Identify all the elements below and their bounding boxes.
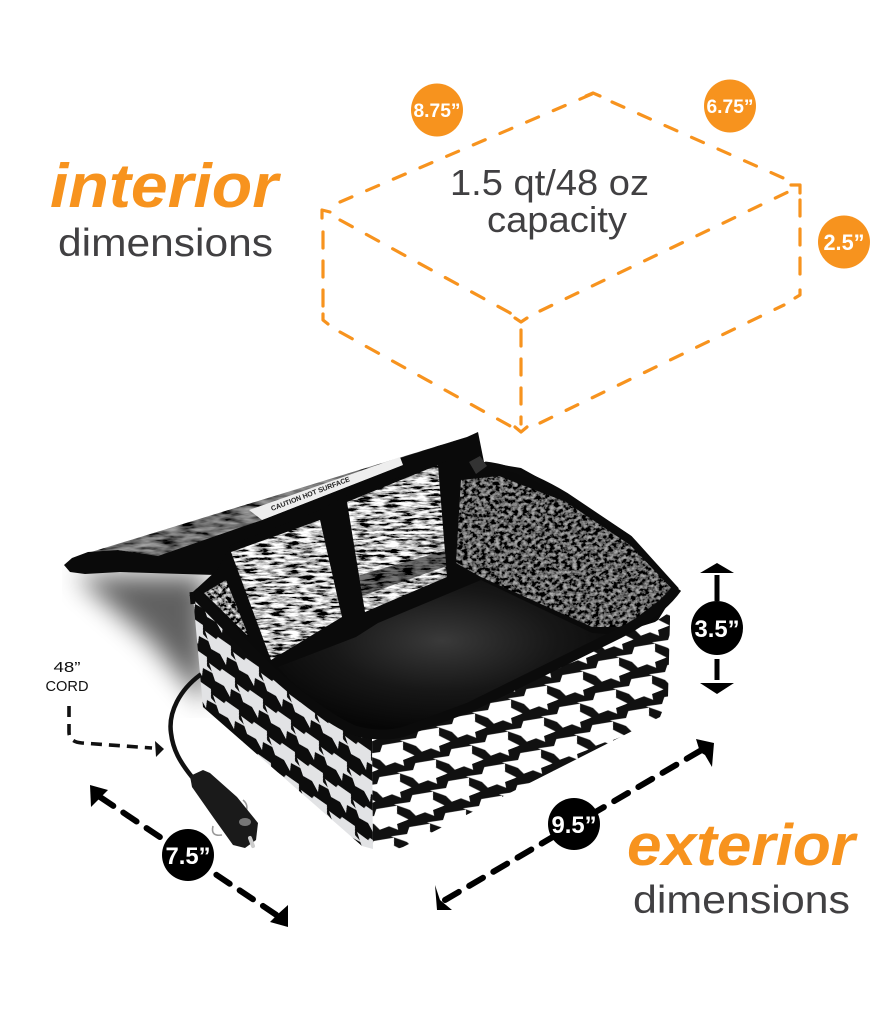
rear wall black backing [193,460,678,725]
text: capacity [450,162,649,240]
caution label: CAUTION HOT SURFACE [270,476,351,513]
badge: 2.5 inch: 2.5” [824,230,864,255]
zipper pull [469,456,487,474]
text: capacity: capacity [487,199,627,240]
heating tray [278,580,620,732]
heading: interior dimensions: dimensions [58,222,273,265]
label: 48 inch cord: CORD [46,678,89,695]
heading: interior dimensions [50,152,281,265]
dimension: 3.5 inch height [691,563,743,694]
bag left face houndstooth [193,596,373,849]
badge: 8.75 inch: 8.75” [414,101,460,122]
foil panel left wall [204,580,248,636]
dimension: 3.5 inch height: 3.5” [694,616,740,643]
badge: 2.5 inch [818,216,870,268]
dimension: 9.5 inch length [435,739,714,910]
lid underside foil [92,437,466,556]
foil panel right wall [456,476,671,627]
lid hinge strip [158,432,484,575]
foil panel centre-right [347,465,447,612]
heading: exterior dimensions [627,813,859,922]
heading: interior dimensions: interior [50,152,281,221]
foil panel centre-left [231,520,342,660]
heading: exterior dimensions: dimensions [633,879,850,922]
power cord [171,675,200,777]
caution label [249,457,403,520]
car plug [190,770,258,848]
bag shadow [75,575,205,705]
label: 48 inch cord: 48” [54,659,80,676]
badge: 6.75 inch [704,80,756,132]
text: capacity: 1.5 qt/48 oz [450,162,649,203]
lid black edge [64,550,222,575]
illustration: open lunch bag [64,430,680,853]
zipper rim [193,588,677,735]
badge: 8.75 inch [411,84,463,136]
label: 48 inch cord [46,659,89,695]
heading: exterior dimensions: exterior [627,813,859,878]
dimension: 9.5 inch length: 9.5” [552,812,596,839]
arrow: cord pointer [69,706,164,757]
dimension: 7.5 inch width [90,785,288,927]
diagram: interior box dashed outline [322,93,800,432]
badge: 6.75 inch: 6.75” [706,97,754,118]
dimension: 7.5 inch width: 7.5” [166,843,210,870]
bag right face houndstooth [372,612,670,853]
